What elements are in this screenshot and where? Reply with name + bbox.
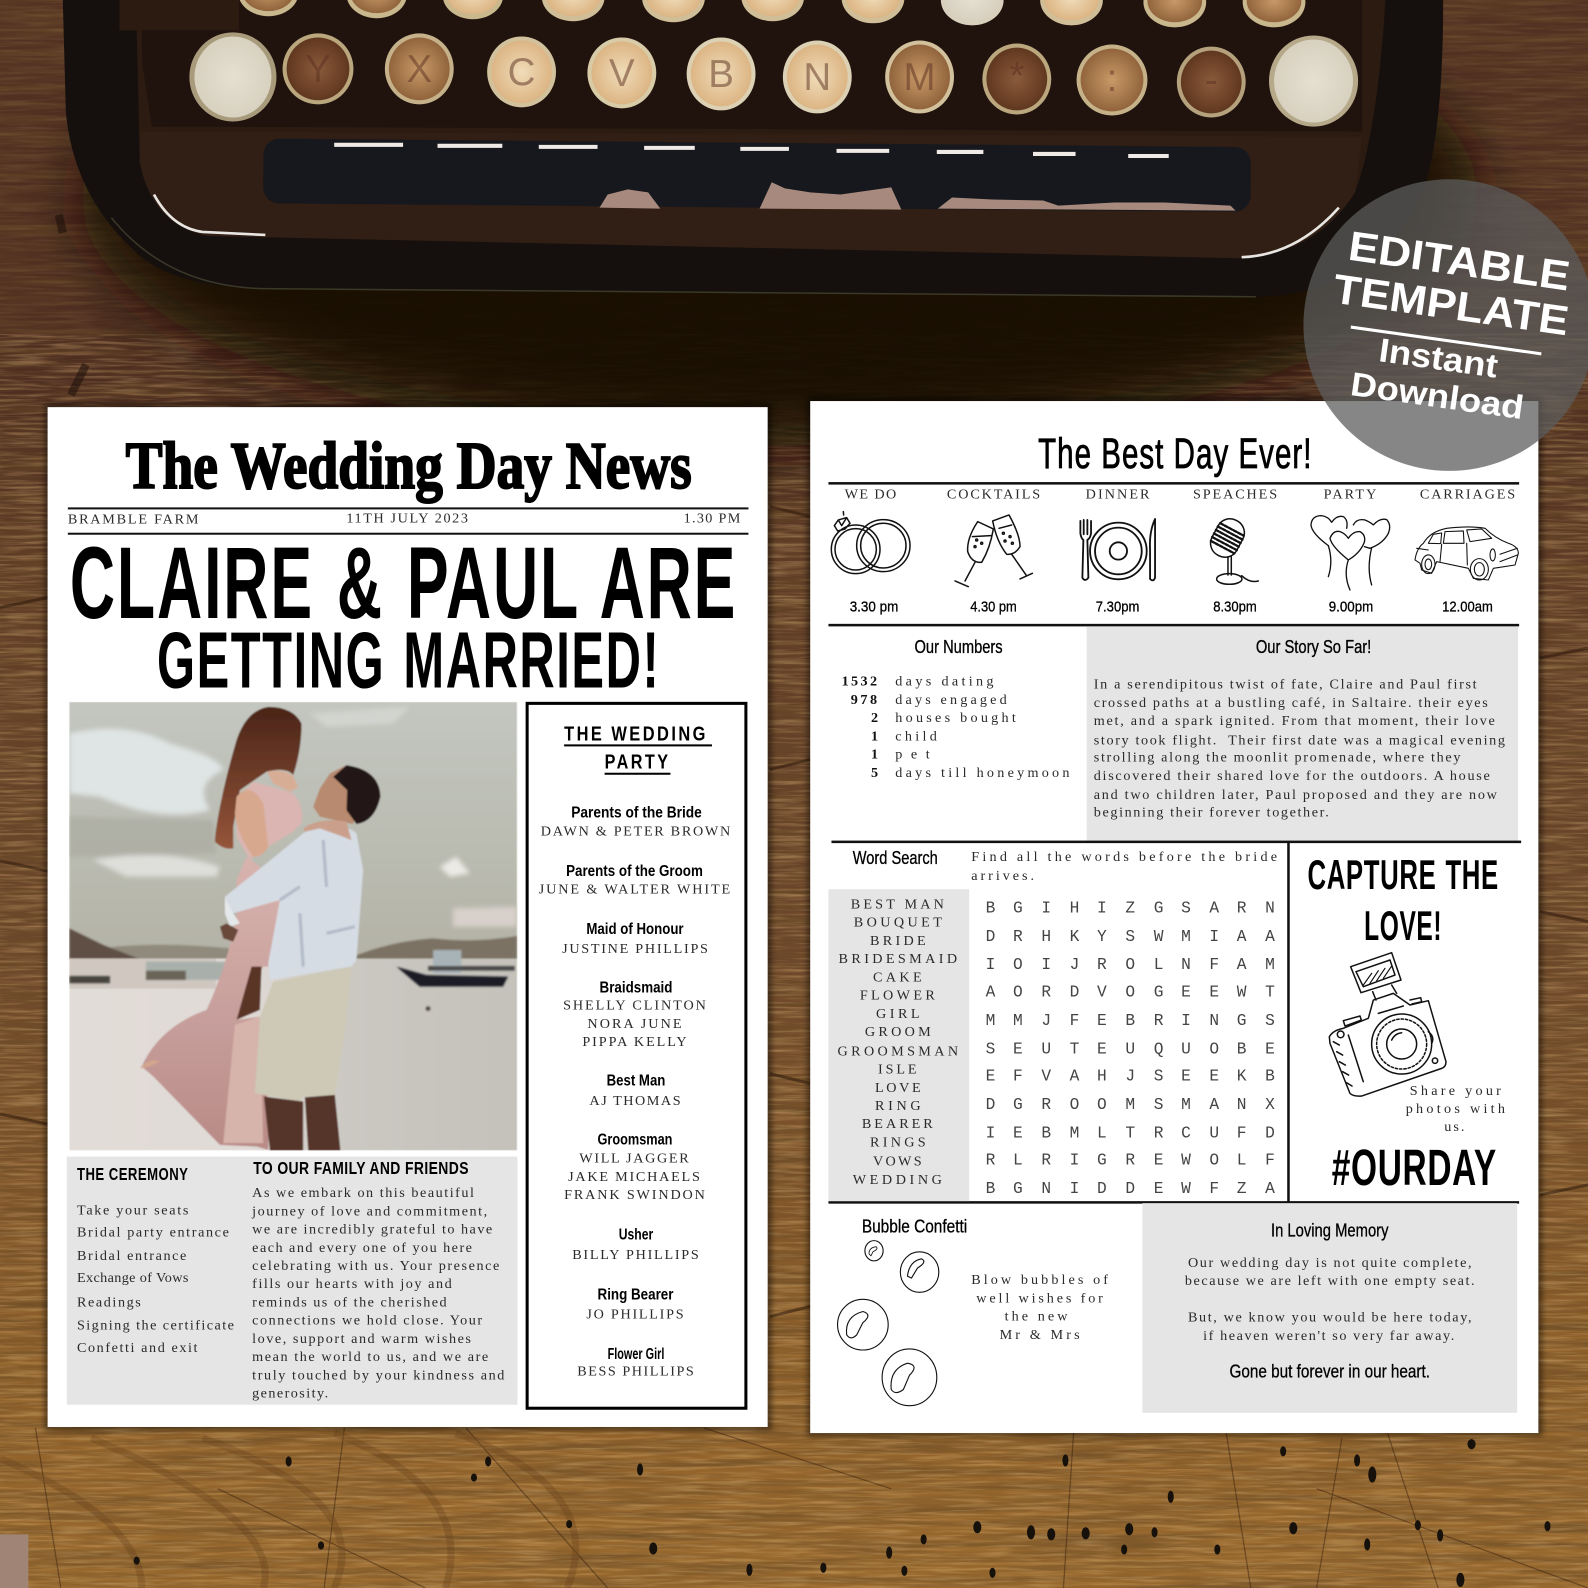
date bar bbox=[68, 507, 748, 535]
schedule labels: CARRIAGES bbox=[1420, 486, 1515, 502]
badge text bbox=[1318, 221, 1578, 432]
left newspaper page bbox=[48, 407, 768, 1427]
page title: The Best Day Ever! bbox=[1038, 430, 1313, 478]
family message: fills our hearts with joy and bbox=[252, 1276, 452, 1292]
word search grid: I bbox=[1070, 1152, 1079, 1170]
word search grid: S bbox=[1154, 1096, 1163, 1114]
share caption: Share your bbox=[1410, 1083, 1501, 1099]
word search grid: D bbox=[1070, 984, 1079, 1002]
word search grid: R bbox=[1154, 1124, 1164, 1142]
word search heading bbox=[853, 848, 1277, 884]
word list: BOUQUET bbox=[854, 915, 942, 931]
word list: LOVE bbox=[875, 1080, 921, 1096]
word search grid: E bbox=[1097, 1012, 1107, 1030]
keys: bottom row: : bbox=[1107, 57, 1117, 100]
word search grid: E bbox=[1154, 1152, 1163, 1170]
word search grid: E bbox=[1209, 984, 1219, 1002]
word list: RINGS bbox=[870, 1134, 926, 1150]
in loving memory panel: if heaven weren't so very far away. bbox=[1203, 1328, 1454, 1344]
our numbers: 2 bbox=[871, 710, 878, 726]
word search grid: G bbox=[1013, 1180, 1023, 1198]
word list: RING bbox=[875, 1098, 921, 1114]
word search grid: E bbox=[1181, 984, 1191, 1002]
word search grid: F bbox=[1070, 1012, 1079, 1030]
type bar plate bbox=[263, 138, 1251, 212]
word search grid: I bbox=[1209, 928, 1219, 946]
in loving memory panel: because we are left with one empty seat. bbox=[1185, 1273, 1475, 1289]
schedule labels: WE DO bbox=[845, 486, 896, 502]
word search grid: W bbox=[1154, 928, 1164, 946]
word search grid: D bbox=[1097, 1180, 1107, 1198]
ceremony schedule: Readings bbox=[77, 1294, 141, 1310]
badge text: TEMPLATE bbox=[1331, 265, 1572, 344]
in loving memory panel: Gone but forever in our heart. bbox=[1229, 1361, 1430, 1381]
typewriter bbox=[63, 0, 1443, 297]
schedule labels bbox=[845, 486, 1515, 502]
party names: BILLY PHILLIPS bbox=[572, 1247, 699, 1263]
our story panel: crossed paths at a bustling café, in Saltaire. their eyes bbox=[1094, 695, 1488, 711]
word search grid: L bbox=[1237, 1152, 1246, 1170]
our numbers bbox=[842, 637, 1069, 781]
word search grid: E bbox=[1209, 1068, 1219, 1086]
ceremony schedule: Bridal party entrance bbox=[77, 1225, 229, 1241]
party names: Braidsmaid bbox=[600, 980, 672, 997]
share caption: photos with bbox=[1406, 1101, 1505, 1117]
word search grid: D bbox=[986, 928, 995, 946]
word search grid: I bbox=[1097, 899, 1107, 917]
word search grid: I bbox=[986, 1124, 995, 1142]
word search grid: T bbox=[1070, 1040, 1080, 1058]
word search heading: Word Search bbox=[853, 848, 938, 868]
schedule times: 4.30 pm bbox=[970, 599, 1017, 616]
word search grid: L bbox=[1154, 956, 1163, 974]
keys: bottom row: N bbox=[803, 56, 831, 99]
party names: Parents of the Groom bbox=[566, 863, 703, 880]
word search grid: O bbox=[1013, 956, 1023, 974]
word search grid: U bbox=[1125, 1040, 1135, 1058]
word search grid: X bbox=[1265, 1096, 1275, 1114]
word search grid bbox=[986, 899, 1275, 1198]
our story panel: discovered their shared love for the outdoors. A house bbox=[1094, 768, 1490, 784]
word search grid: F bbox=[1013, 1068, 1023, 1086]
party names: Usher bbox=[619, 1227, 653, 1244]
keys: bottom row: X bbox=[406, 48, 432, 91]
capture the love panel: LOVE! bbox=[1364, 902, 1442, 949]
word search grid: G bbox=[1097, 1152, 1107, 1170]
word search grid: N bbox=[1041, 1180, 1051, 1198]
in loving memory panel: Our wedding day is not quite complete, bbox=[1188, 1255, 1472, 1271]
icon: champagne flutes bbox=[955, 515, 1032, 587]
word search grid: E bbox=[1013, 1040, 1023, 1058]
key well bbox=[142, 0, 1362, 132]
family message: truly touched by your kindness and bbox=[252, 1367, 504, 1383]
keys: bottom row: * bbox=[1009, 55, 1024, 98]
family message: reminds us of the cherished bbox=[252, 1294, 447, 1310]
typewriter inner panel bbox=[120, 0, 1385, 258]
word search grid: M bbox=[1125, 1096, 1135, 1114]
schedule times: 3.30 pm bbox=[850, 599, 898, 616]
word list: BEST MAN bbox=[851, 896, 944, 912]
word search grid: M bbox=[1181, 928, 1191, 946]
our story panel: Our Story So Far! bbox=[1256, 637, 1371, 657]
word list: CAKE bbox=[873, 969, 922, 985]
word search grid: Q bbox=[1154, 1040, 1163, 1058]
share caption bbox=[1406, 1083, 1505, 1135]
schedule times: 8.30pm bbox=[1213, 599, 1257, 616]
party names: DAWN & PETER BROWN bbox=[541, 824, 730, 840]
word search grid: B bbox=[1237, 1040, 1247, 1058]
party names: JO PHILLIPS bbox=[586, 1307, 684, 1323]
icon: wedding rings bbox=[831, 512, 910, 574]
word search grid: W bbox=[1237, 984, 1247, 1002]
our numbers: 1 bbox=[871, 728, 878, 744]
word search grid: O bbox=[1125, 984, 1135, 1002]
ceremony schedule: Signing the certificate bbox=[77, 1318, 234, 1334]
word search grid: S bbox=[1125, 928, 1135, 946]
word search grid: W bbox=[1181, 1152, 1191, 1170]
word search grid: L bbox=[1013, 1152, 1023, 1170]
word search grid: R bbox=[1013, 928, 1023, 946]
word search grid: A bbox=[1209, 899, 1219, 917]
word search grid: R bbox=[1041, 1152, 1051, 1170]
main headline: GETTING MARRIED! bbox=[157, 616, 660, 705]
keys: bottom row: C bbox=[508, 51, 535, 94]
word search grid: A bbox=[1265, 928, 1275, 946]
icon: heart balloons bbox=[1311, 516, 1390, 590]
masthead title: The Wedding Day News bbox=[126, 429, 692, 503]
word search grid: T bbox=[1125, 1124, 1135, 1142]
keys: top row bbox=[238, 0, 1305, 27]
word search grid: Y bbox=[1097, 928, 1107, 946]
bubble caption: Mr & Mrs bbox=[1000, 1327, 1080, 1343]
family message: each and every one of you here bbox=[252, 1240, 472, 1256]
word search grid: N bbox=[1237, 1096, 1246, 1114]
our numbers: pet bbox=[895, 747, 930, 763]
schedule times: 9.00pm bbox=[1329, 599, 1373, 616]
word search grid: O bbox=[1070, 1096, 1079, 1114]
word search grid: V bbox=[1097, 984, 1107, 1002]
word search grid: G bbox=[1237, 1012, 1246, 1030]
word list bbox=[828, 889, 969, 1201]
word search grid: O bbox=[1013, 984, 1023, 1002]
word search grid: I bbox=[1070, 1180, 1079, 1198]
word list: WEDDING bbox=[853, 1172, 942, 1188]
share caption: us. bbox=[1444, 1119, 1464, 1135]
word list: FLOWER bbox=[860, 988, 935, 1004]
word search heading: arrives. bbox=[971, 868, 1034, 884]
word search grid: M bbox=[986, 1012, 995, 1030]
schedule labels: PARTY bbox=[1324, 486, 1376, 502]
word search grid: K bbox=[1070, 928, 1080, 946]
word search grid: E bbox=[1265, 1040, 1275, 1058]
keys: bottom row: Y bbox=[305, 48, 331, 91]
word search grid: M bbox=[1181, 1096, 1191, 1114]
word search grid: O bbox=[1097, 1096, 1107, 1114]
date bar: 1.30 PM bbox=[684, 511, 741, 527]
capture the love panel: #OURDAY bbox=[1332, 1139, 1497, 1196]
word search grid: L bbox=[1097, 1124, 1107, 1142]
date bar: 11TH JULY 2023 bbox=[346, 511, 468, 527]
our numbers: 1532 bbox=[842, 674, 877, 690]
keys: bottom row: B bbox=[708, 53, 734, 96]
word search grid: B bbox=[986, 1180, 996, 1198]
word search grid: A bbox=[1070, 1068, 1080, 1086]
our story panel: and two children later, Paul proposed and they are now bbox=[1094, 787, 1498, 803]
word search grid: J bbox=[1070, 956, 1079, 974]
badge text: EDITABLE bbox=[1346, 222, 1573, 299]
our numbers: 1 bbox=[871, 747, 878, 763]
ceremony panel bbox=[67, 1157, 518, 1405]
icon: microphone bbox=[1206, 514, 1258, 584]
word search grid: M bbox=[1265, 956, 1275, 974]
word search grid: V bbox=[1041, 1068, 1051, 1086]
schedule labels: COCKTAILS bbox=[947, 486, 1040, 502]
badge text: Instant bbox=[1377, 332, 1500, 386]
word search grid: I bbox=[1181, 1012, 1191, 1030]
word search grid: N bbox=[1265, 899, 1275, 917]
word search grid: S bbox=[1181, 899, 1191, 917]
word search grid: B bbox=[1125, 1012, 1135, 1030]
family message: TO OUR FAMILY AND FRIENDS bbox=[253, 1158, 469, 1178]
our numbers: days till honeymoon bbox=[895, 765, 1069, 781]
word search grid: O bbox=[1209, 1040, 1219, 1058]
family message: celebrating with us. Your presence bbox=[252, 1258, 499, 1274]
word search grid: E bbox=[1181, 1068, 1191, 1086]
keys: bottom row: - bbox=[1205, 59, 1218, 102]
word list: BEARER bbox=[862, 1116, 933, 1132]
our story panel bbox=[1087, 627, 1518, 841]
word search grid: H bbox=[1097, 1068, 1107, 1086]
word search grid: S bbox=[1265, 1012, 1275, 1030]
word search grid: A bbox=[1237, 956, 1247, 974]
wedding party heading bbox=[564, 723, 712, 775]
our numbers: houses bought bbox=[895, 710, 1016, 726]
word search grid: R bbox=[1097, 956, 1107, 974]
word search grid: R bbox=[986, 1152, 996, 1170]
party names: NORA JUNE bbox=[587, 1016, 682, 1032]
keys: bottom row: V bbox=[609, 52, 635, 95]
plate highlights bbox=[154, 194, 1339, 257]
icon: plate and cutlery bbox=[1080, 519, 1155, 580]
word list: ISLE bbox=[878, 1062, 917, 1078]
word search grid: F bbox=[1237, 1124, 1246, 1142]
party names: Maid of Honour bbox=[586, 921, 684, 938]
schedule times: 7.30pm bbox=[1096, 599, 1139, 616]
word search grid: J bbox=[1041, 1012, 1051, 1030]
ceremony schedule: THE CEREMONY bbox=[77, 1164, 188, 1184]
word search grid: E bbox=[1154, 1180, 1163, 1198]
word search grid: E bbox=[1013, 1124, 1023, 1142]
badge: editable template bbox=[1303, 179, 1588, 471]
party names: JAKE MICHAELS bbox=[568, 1169, 700, 1185]
word search grid: Z bbox=[1125, 899, 1135, 917]
word search grid: F bbox=[1209, 1180, 1219, 1198]
our numbers: days dating bbox=[895, 674, 994, 690]
word search grid: E bbox=[986, 1068, 995, 1086]
word search grid: O bbox=[1209, 1152, 1219, 1170]
bubble confetti: Bubble Confetti bbox=[862, 1217, 967, 1237]
word search grid: I bbox=[1041, 899, 1051, 917]
family message: we are incredibly grateful to have bbox=[252, 1222, 492, 1238]
word search grid: W bbox=[1181, 1180, 1191, 1198]
ceremony schedule bbox=[77, 1164, 234, 1356]
capture the love panel bbox=[1307, 851, 1505, 1196]
word search grid: O bbox=[1125, 956, 1135, 974]
party names: AJ THOMAS bbox=[589, 1093, 681, 1109]
word search grid: F bbox=[1265, 1152, 1275, 1170]
party names: WILL JAGGER bbox=[579, 1151, 689, 1167]
in loving memory panel: But, we know you would be here today, bbox=[1188, 1310, 1472, 1326]
word list: VOWS bbox=[873, 1154, 922, 1170]
word search grid: B bbox=[1041, 1124, 1051, 1142]
word search grid: G bbox=[1154, 984, 1163, 1002]
word search grid: U bbox=[1209, 1124, 1219, 1142]
word search grid: F bbox=[1209, 956, 1219, 974]
family message: As we embark on this beautiful bbox=[252, 1185, 474, 1201]
keys: bottom row: M bbox=[904, 56, 936, 99]
word search grid: R bbox=[1125, 1152, 1135, 1170]
our story panel: strolling along the moonlit promenade, where they bbox=[1094, 750, 1461, 766]
word search grid: A bbox=[986, 984, 996, 1002]
word list: GROOM bbox=[865, 1024, 931, 1040]
party names: Flower Girl bbox=[608, 1346, 664, 1363]
party names: BESS PHILLIPS bbox=[577, 1363, 694, 1379]
word search grid: R bbox=[1041, 984, 1051, 1002]
word search grid: M bbox=[1013, 1012, 1023, 1030]
family message bbox=[251, 1158, 504, 1402]
word search grid: S bbox=[986, 1040, 995, 1058]
right newspaper page bbox=[810, 401, 1538, 1433]
our numbers: 978 bbox=[851, 692, 877, 708]
typewriter frame bbox=[63, 0, 1443, 297]
word search grid: R bbox=[1154, 1012, 1164, 1030]
our numbers: 5 bbox=[871, 765, 878, 781]
icon: camera bbox=[1329, 953, 1446, 1096]
wedding party heading: THE WEDDING bbox=[564, 723, 708, 745]
our numbers: days engaged bbox=[895, 692, 1007, 708]
party names: JUSTINE PHILLIPS bbox=[562, 941, 708, 957]
wedding party heading: PARTY bbox=[605, 752, 670, 774]
party names: JUNE & WALTER WHITE bbox=[539, 881, 730, 897]
word list: GIRL bbox=[876, 1006, 920, 1022]
word list: GROOMSMAN bbox=[838, 1043, 958, 1059]
word search grid: R bbox=[1041, 1096, 1051, 1114]
word search grid: A bbox=[1237, 928, 1247, 946]
word search grid: I bbox=[986, 956, 995, 974]
word search grid: U bbox=[1181, 1040, 1191, 1058]
word search grid: B bbox=[1265, 1068, 1275, 1086]
keys: bottom row bbox=[189, 32, 1358, 127]
word search grid: D bbox=[986, 1096, 995, 1114]
bubble caption bbox=[971, 1272, 1108, 1343]
couple photo bbox=[69, 702, 517, 1150]
family message: mean the world to us, and we are bbox=[252, 1349, 488, 1365]
schedule labels: SPEACHES bbox=[1193, 486, 1277, 502]
ceremony schedule: Confetti and exit bbox=[77, 1340, 198, 1356]
word list: BRIDE bbox=[870, 933, 926, 949]
family message: journey of love and commitment, bbox=[251, 1203, 487, 1219]
schedule times bbox=[850, 599, 1493, 616]
party names: FRANK SWINDON bbox=[564, 1187, 705, 1203]
word search grid: H bbox=[1070, 899, 1079, 917]
word search grid: J bbox=[1125, 1068, 1135, 1086]
word search grid: A bbox=[1209, 1096, 1219, 1114]
word search grid: S bbox=[1154, 1068, 1163, 1086]
main headline: CLAIRE & PAUL ARE bbox=[70, 525, 737, 640]
family message: love, support and warm wishes bbox=[252, 1331, 471, 1347]
party names: Best Man bbox=[607, 1073, 665, 1090]
bubble caption: the new bbox=[1005, 1309, 1068, 1325]
date bar: BRAMBLE FARM bbox=[68, 512, 199, 528]
word search heading: Find all the words before the bride bbox=[971, 849, 1277, 865]
party names: SHELLY CLINTON bbox=[563, 998, 706, 1014]
badge text: Download bbox=[1348, 366, 1526, 427]
our story panel: In a serendipitous twist of fate, Claire and Paul first bbox=[1094, 677, 1477, 693]
word search grid: G bbox=[1013, 899, 1023, 917]
icon: bubbles bbox=[838, 1241, 939, 1406]
word search grid: Z bbox=[1237, 1180, 1247, 1198]
in loving memory panel bbox=[1142, 1203, 1517, 1413]
page shadows bbox=[45, 397, 1542, 1436]
word list: BRIDESMAID bbox=[839, 951, 957, 967]
bubble confetti bbox=[838, 1217, 1108, 1406]
our numbers: child bbox=[895, 728, 937, 744]
schedule labels: DINNER bbox=[1086, 486, 1150, 502]
word search grid: K bbox=[1237, 1068, 1247, 1086]
word search grid: G bbox=[1013, 1096, 1023, 1114]
word search grid: D bbox=[1125, 1180, 1135, 1198]
word search grid: D bbox=[1265, 1124, 1275, 1142]
party names bbox=[539, 804, 730, 1379]
family message: generosity. bbox=[252, 1386, 328, 1402]
word search grid: U bbox=[1041, 1040, 1051, 1058]
ceremony schedule: Take your seats bbox=[77, 1202, 188, 1218]
word search grid: T bbox=[1265, 984, 1275, 1002]
our numbers: Our Numbers bbox=[915, 637, 1003, 657]
bubble caption: well wishes for bbox=[976, 1290, 1103, 1306]
word search grid: R bbox=[1237, 899, 1247, 917]
word search grid: I bbox=[1041, 956, 1051, 974]
word search grid: E bbox=[1097, 1040, 1107, 1058]
icon: vintage car bbox=[1415, 527, 1518, 580]
our story panel: met, and a spark ignited. From that moment, their love bbox=[1094, 713, 1495, 729]
word search grid: N bbox=[1181, 956, 1191, 974]
word search grid: M bbox=[1070, 1124, 1079, 1142]
main headline bbox=[70, 525, 737, 705]
family message: connections we hold close. Your bbox=[252, 1313, 482, 1329]
party names: PIPPA KELLY bbox=[582, 1034, 687, 1050]
word search grid: H bbox=[1041, 928, 1051, 946]
schedule times: 12.00am bbox=[1442, 599, 1493, 616]
wedding party panel bbox=[527, 703, 746, 1408]
party names: Parents of the Bride bbox=[571, 804, 702, 821]
word search grid: A bbox=[1265, 1180, 1275, 1198]
in loving memory panel: In Loving Memory bbox=[1271, 1221, 1389, 1241]
party names: Ring Bearer bbox=[598, 1286, 673, 1303]
ceremony schedule: Bridal entrance bbox=[77, 1248, 186, 1264]
word search grid: C bbox=[1181, 1124, 1191, 1142]
bubble caption: Blow bubbles of bbox=[971, 1272, 1108, 1288]
our story panel: story took flight. Their first date was a magical evening bbox=[1094, 732, 1505, 748]
word search grid: G bbox=[1154, 899, 1163, 917]
our story panel: beginning their forever together. bbox=[1094, 804, 1329, 820]
party names: Groomsman bbox=[598, 1131, 672, 1148]
word search grid: N bbox=[1209, 1012, 1219, 1030]
word search grid: B bbox=[986, 899, 996, 917]
ceremony schedule: Exchange of Vows bbox=[77, 1270, 188, 1286]
